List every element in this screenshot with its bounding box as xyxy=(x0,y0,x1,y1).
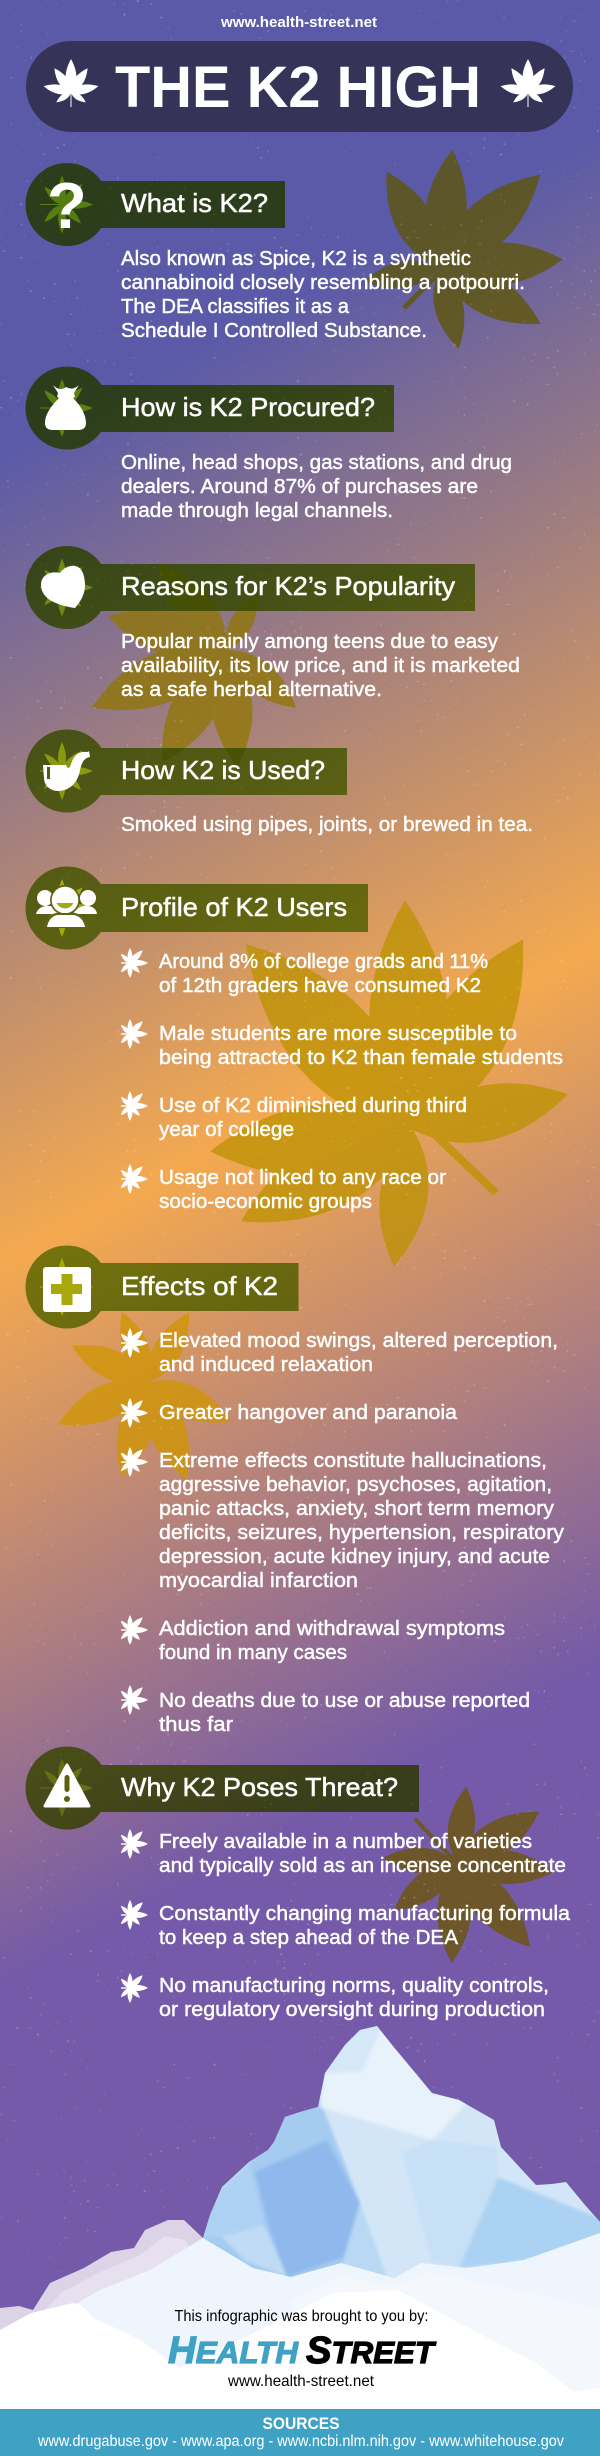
bullets: socio-economic groups xyxy=(159,1191,372,1213)
bullets: Constantly changing manufacturing formula xyxy=(159,1903,571,1925)
bullets: thus far xyxy=(159,1714,233,1736)
bullets: and typically sold as an incense concentrate xyxy=(159,1855,566,1877)
body text: cannabinoid closely resembling a potpourri. xyxy=(121,272,525,294)
logo: HealthStreet xyxy=(168,2330,437,2372)
icon: people xyxy=(36,885,97,928)
icon: heart xyxy=(41,566,85,608)
section: Effects of K2 xyxy=(26,1246,564,1736)
body text xyxy=(121,452,512,522)
body text: Also known as Spice, K2 is a synthetic xyxy=(121,248,471,270)
background leaf 3 xyxy=(206,899,574,1270)
bullets: year of college xyxy=(159,1119,294,1141)
sources bar: www.drugabuse.gov - www.apa.org - www.ncbi.nlm.nih.gov - www.whitehouse.gov xyxy=(37,2433,564,2450)
body text: made through legal channels. xyxy=(121,500,393,522)
heading: Reasons for K2’s Popularity xyxy=(121,571,455,601)
bullets xyxy=(119,1829,571,2021)
background leaf 5 xyxy=(382,1785,556,1964)
bullets: depression, acute kidney injury, and acute xyxy=(159,1546,550,1568)
heading: Effects of K2 xyxy=(121,1271,278,1301)
body text: Online, head shops, gas stations, and drug xyxy=(121,452,512,474)
bullets: found in many cases xyxy=(159,1642,347,1664)
bullets: panic attacks, anxiety, short term memory xyxy=(159,1498,554,1520)
body text: The DEA classifies it as a xyxy=(121,296,350,318)
body text: Popular mainly among teens due to easy xyxy=(121,631,498,653)
heading: What is K2? xyxy=(121,188,268,218)
bullets: to keep a step ahead of the DEA xyxy=(159,1927,459,1949)
logo: HealthStreet: STREET xyxy=(306,2330,437,2372)
body text xyxy=(121,248,525,342)
heading: How is K2 Procured? xyxy=(121,392,375,422)
body text: as a safe herbal alternative. xyxy=(121,679,382,701)
sources bar xyxy=(0,2409,600,2456)
bottom website url: www.health-street.net xyxy=(227,2373,375,2390)
heading: Why K2 Poses Threat? xyxy=(121,1772,398,1802)
top website url: www.health-street.net xyxy=(220,14,377,31)
section: Why K2 Poses Threat xyxy=(26,1746,571,2021)
icon: question mark: ? xyxy=(47,169,87,242)
bullets: aggressive behavior, psychoses, agitation, xyxy=(159,1474,552,1496)
bullets: Addiction and withdrawal symptoms xyxy=(159,1618,505,1640)
bullets: Freely available in a number of varieties xyxy=(159,1831,532,1853)
title banner: THE K2 HIGH xyxy=(115,55,481,120)
icon: money bag xyxy=(45,385,86,430)
bullets xyxy=(119,1328,564,1736)
bullets: Usage not linked to any race or xyxy=(159,1167,446,1189)
bullets: and induced relaxation xyxy=(159,1354,373,1376)
body text: Smoked using pipes, joints, or brewed in tea. xyxy=(121,814,533,836)
background leaf 1 xyxy=(362,148,564,352)
section: What is K2 xyxy=(26,163,525,342)
bullets: Around 8% of college grads and 11% xyxy=(159,951,488,973)
bullets: Male students are more susceptible to xyxy=(159,1023,517,1045)
section: How is K2 Procured xyxy=(26,366,512,522)
credit line: This infographic was brought to you by: xyxy=(174,2308,428,2325)
logo: HealthStreet: HEALTH xyxy=(168,2330,299,2372)
body text xyxy=(121,631,520,701)
bullets: Greater hangover and paranoia xyxy=(159,1402,458,1424)
body text: availability, its low price, and it is marketed xyxy=(121,655,520,677)
body text: Schedule I Controlled Substance. xyxy=(121,320,427,342)
section: How K2 is Used xyxy=(26,730,533,836)
bullets: myocardial infarction xyxy=(159,1570,358,1592)
bullets: of 12th graders have consumed K2 xyxy=(159,975,481,997)
bullets: No deaths due to use or abuse reported xyxy=(159,1690,530,1712)
title banner xyxy=(26,41,573,132)
mountain illustration xyxy=(0,2020,600,2410)
bullets: Elevated mood swings, altered perception, xyxy=(159,1330,558,1352)
icon: medical plus xyxy=(43,1267,91,1312)
bullets: deficits, seizures, hypertension, respiratory xyxy=(159,1522,564,1544)
section: Profile of K2 Users xyxy=(26,866,563,1213)
bullets xyxy=(119,948,563,1213)
bullets: Extreme effects constitute hallucinations, xyxy=(159,1450,547,1472)
icon: pipe xyxy=(43,751,90,791)
background leaf 2 xyxy=(82,551,306,774)
section: Reasons for popularity xyxy=(26,546,520,701)
background leaf 4 xyxy=(51,1306,238,1487)
icon: warning triangle xyxy=(45,1765,89,1806)
bullets: or regulatory oversight during production xyxy=(159,1999,545,2021)
heading: Profile of K2 Users xyxy=(121,892,347,922)
bullets: being attracted to K2 than female students xyxy=(159,1047,563,1069)
heading: How K2 is Used? xyxy=(121,755,325,785)
bullets: Use of K2 diminished during third xyxy=(159,1095,467,1117)
body text: dealers. Around 87% of purchases are xyxy=(121,476,478,498)
sources bar: SOURCES xyxy=(262,2414,340,2433)
bullets: No manufacturing norms, quality controls, xyxy=(159,1975,549,1997)
